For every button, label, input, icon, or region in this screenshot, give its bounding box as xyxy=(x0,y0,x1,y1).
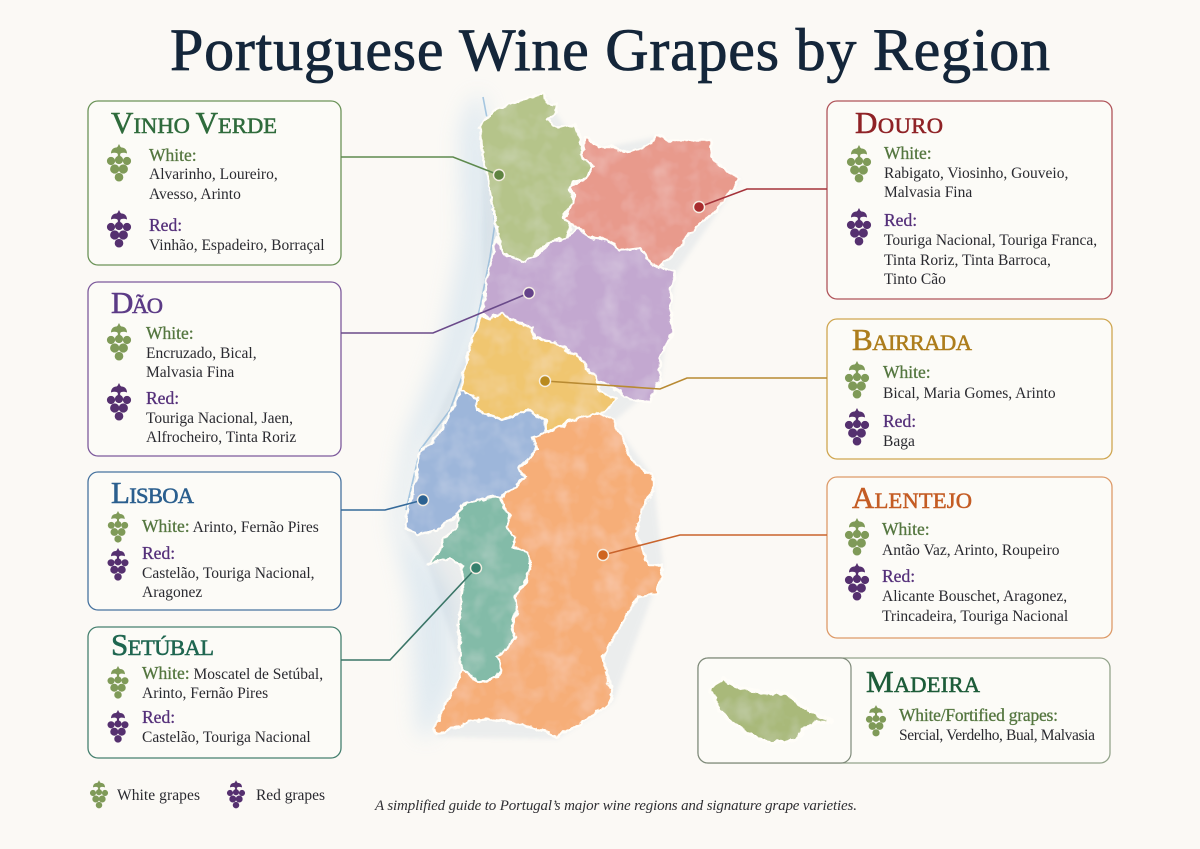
panel: Madeira xyxy=(698,658,1110,763)
red grapes xyxy=(146,388,296,446)
heading: VINHO VERDE xyxy=(111,105,277,140)
icon: white grape xyxy=(847,145,871,182)
heading: BAIRRADA xyxy=(852,322,973,357)
white grapes xyxy=(882,519,1060,559)
white grapes: White: xyxy=(883,362,931,382)
heading: DÃO xyxy=(111,285,163,320)
red grapes: Aragonez xyxy=(142,584,202,601)
red grapes: Red: xyxy=(146,388,179,408)
red grapes xyxy=(142,543,315,601)
white grapes: Bical, Maria Gomes, Arinto xyxy=(883,385,1056,402)
title: Portuguese Wine Grapes by Region xyxy=(170,17,1050,83)
panel: Vinho Verde xyxy=(88,101,341,265)
icon: white grape xyxy=(845,518,869,556)
white grapes: Alvarinho, Loureiro, xyxy=(149,166,278,183)
white grapes: White: xyxy=(882,519,930,539)
red grapes: Red: xyxy=(142,707,175,727)
leader: Alentejo xyxy=(598,535,827,560)
red grapes: Red: xyxy=(884,210,917,230)
region: Setúbal xyxy=(428,497,530,682)
white grapes: Rabigato, Viosinho, Gouveio, xyxy=(884,165,1068,182)
white grapes: Arinto, Fernão Pires xyxy=(142,685,268,702)
red grapes: Alicante Bouschet, Aragonez, xyxy=(882,588,1067,605)
map regions xyxy=(405,93,740,737)
white grapes: Avesso, Arinto xyxy=(149,186,241,203)
white grapes: White: xyxy=(146,323,194,343)
white grapes: White: Arinto, Fernão Pires xyxy=(142,516,319,536)
white grapes xyxy=(146,323,257,381)
icon: white grape xyxy=(108,511,128,543)
icon: white grape xyxy=(107,323,131,360)
coastline xyxy=(406,97,495,510)
red grapes: Castelão, Touriga Nacional xyxy=(142,729,311,746)
red grapes: Touriga Nacional, Touriga Franca, xyxy=(884,232,1097,249)
region: Dão xyxy=(482,227,675,402)
icon: red grape xyxy=(107,210,131,248)
heading: DOURO xyxy=(855,105,943,140)
red grapes: Baga xyxy=(883,433,915,450)
icon: white grape xyxy=(845,361,869,398)
white grapes: Malvasia Fina xyxy=(146,364,234,381)
icon: red grape xyxy=(845,563,869,600)
map: Madeira island xyxy=(710,678,833,743)
region: Alentejo xyxy=(433,413,663,737)
white fortified grapes xyxy=(899,705,1095,744)
leader: Lisboa xyxy=(341,494,428,510)
red grapes xyxy=(149,215,325,254)
red grapes xyxy=(882,566,1068,625)
icon: red grape xyxy=(107,548,129,581)
red grapes: Red: xyxy=(883,411,916,431)
region: Lisboa xyxy=(405,390,547,535)
icon: red grapes xyxy=(227,780,245,808)
icon: red grape xyxy=(847,208,871,246)
leader: Douro xyxy=(694,189,827,212)
panel: Setúbal xyxy=(88,627,341,758)
red grapes: Red: xyxy=(142,543,175,563)
icon: red grape xyxy=(845,408,869,446)
leader: Dão xyxy=(341,288,534,333)
leader: Bairrada xyxy=(540,376,827,389)
panel: Alentejo xyxy=(827,477,1112,638)
red grapes: Tinto Cão xyxy=(884,271,946,288)
panel: Lisboa xyxy=(88,472,341,610)
panel: Douro xyxy=(827,101,1112,299)
panel: Dão xyxy=(88,282,341,456)
red grapes: Touriga Nacional, Jaen, xyxy=(146,410,293,427)
legend label: red: Red grapes xyxy=(256,787,325,804)
white grapes: White: xyxy=(884,143,932,163)
icon: red grape xyxy=(107,383,131,420)
heading: LISBOA xyxy=(111,475,195,510)
icon: white grapes xyxy=(90,780,108,808)
region: Vinho Verde xyxy=(480,93,593,263)
white grapes xyxy=(149,145,278,203)
leader: Vinho Verde xyxy=(341,157,504,180)
white fortified grapes: White/Fortified grapes: xyxy=(899,705,1058,725)
icon: white grape xyxy=(107,144,131,182)
icon: white grape xyxy=(107,666,129,699)
panel: Bairrada xyxy=(827,319,1112,459)
red grapes: Alfrocheiro, Tinta Roriz xyxy=(146,429,296,446)
white grapes: Encruzado, Bical, xyxy=(146,345,257,362)
leader: Setúbal xyxy=(341,562,482,660)
white grapes: White: xyxy=(149,145,197,165)
white grapes: Antão Vaz, Arinto, Roupeiro xyxy=(882,542,1060,559)
red grapes: Red: xyxy=(882,566,915,586)
icon: white grape xyxy=(866,705,886,736)
white grapes: White: Moscatel de Setúbal, xyxy=(142,663,323,683)
heading: MADEIRA xyxy=(866,664,981,699)
inset map frame xyxy=(698,658,851,763)
red grapes: Tinta Roriz, Tinta Barroca, xyxy=(884,252,1051,269)
legend xyxy=(90,780,325,808)
white grapes xyxy=(884,143,1068,201)
footnote: A simplified guide to Portugal’s major wine regions and signature grape varieties. xyxy=(374,798,857,814)
map of Portugal xyxy=(392,93,740,739)
white grapes: Malvasia Fina xyxy=(884,184,972,201)
heading: SETÚBAL xyxy=(111,627,214,662)
red grapes: Castelão, Touriga Nacional, xyxy=(142,565,315,582)
red grapes xyxy=(142,707,311,746)
sea shading along the coast xyxy=(392,97,498,735)
heading: ALENTEJO xyxy=(852,480,972,515)
white fortified grapes: Sercial, Verdelho, Bual, Malvasia xyxy=(899,727,1095,744)
icon: red grape xyxy=(107,710,129,743)
red grapes: Trincadeira, Touriga Nacional xyxy=(882,608,1068,625)
red grapes: Vinhão, Espadeiro, Borraçal xyxy=(149,237,325,254)
region: Bairrada xyxy=(460,313,617,432)
red grapes: Red: xyxy=(149,215,182,235)
land shadow xyxy=(405,95,740,739)
red grapes xyxy=(884,210,1097,288)
region: Douro xyxy=(563,135,740,268)
legend label: white: White grapes xyxy=(117,787,200,804)
white grapes xyxy=(142,663,323,702)
red grapes xyxy=(883,411,916,450)
white grapes xyxy=(883,362,1056,402)
